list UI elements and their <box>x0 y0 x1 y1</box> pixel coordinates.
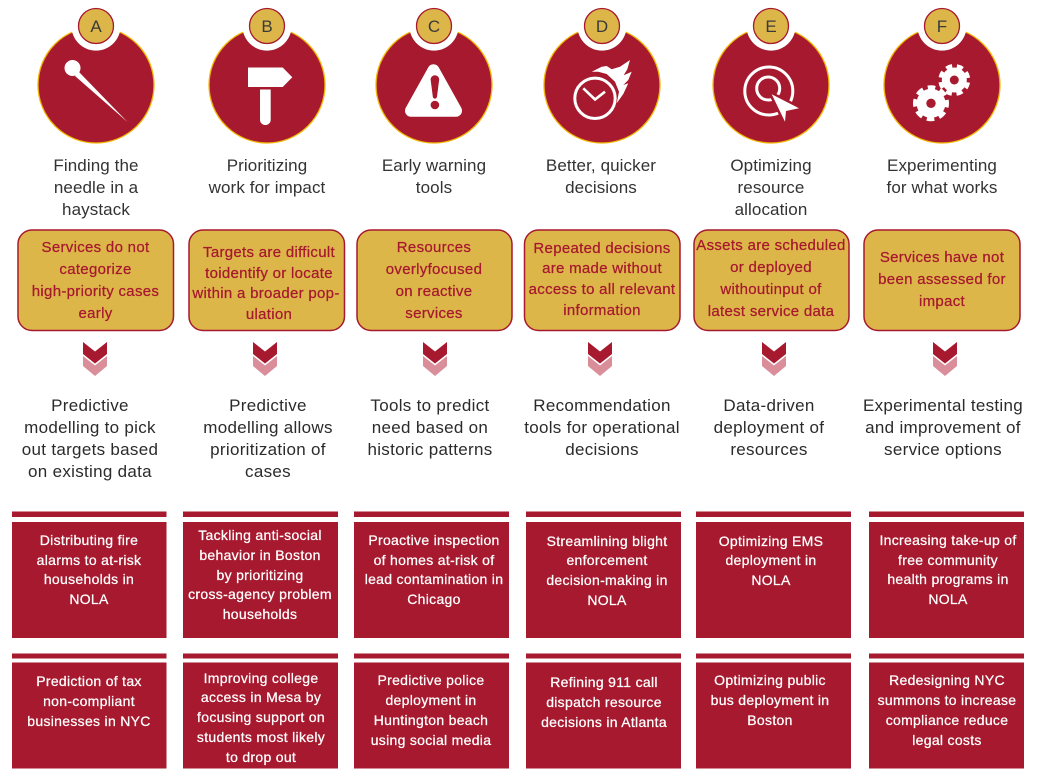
icon: signpost in red circle with badge B: B <box>261 17 273 36</box>
problem box C: overlyfocused <box>386 261 482 278</box>
solution text B <box>203 396 333 481</box>
example card A2: Prediction of tax <box>36 673 142 689</box>
example card D1: enforcement <box>566 552 648 568</box>
icon: target with cursor in red circle with badge E <box>713 1 829 143</box>
example card B1: cross-agency problem <box>188 586 332 602</box>
example card B1: Tackling anti-social <box>198 527 322 543</box>
example card E1: deployment in <box>725 552 817 568</box>
problem box D: are made without <box>542 260 662 277</box>
column E: optimizing resources <box>694 1 851 768</box>
problem box B: ulation <box>246 306 292 323</box>
example card F2: legal costs <box>912 732 982 748</box>
example card C2: Predictive police <box>377 672 485 688</box>
example card B1: by prioritizing <box>217 567 303 583</box>
example card E2: Optimizing public <box>714 672 826 688</box>
solution text E: deployment of <box>714 418 824 437</box>
heading C: tools <box>416 178 452 197</box>
column C: early warning <box>354 1 512 768</box>
problem box F: been assessed for <box>878 271 1006 288</box>
solution text F: Experimental testing <box>863 396 1023 415</box>
example card D2: decisions in Atlanta <box>541 714 667 730</box>
solution text A: Predictive <box>51 396 129 415</box>
example card D2 <box>526 654 681 768</box>
example card C2: deployment in <box>385 692 477 708</box>
problem box D: Repeated decisions <box>533 240 671 257</box>
problem box C: Resources <box>397 239 471 256</box>
arrow: chevrons C <box>423 342 447 376</box>
problem box A: early <box>78 305 113 322</box>
icon: gears in red circle with badge F <box>884 1 1000 143</box>
example card F1: free community <box>898 552 998 568</box>
example card E1: Optimizing EMS <box>719 533 823 549</box>
example card F2: compliance reduce <box>886 712 1008 728</box>
heading D: decisions <box>565 178 637 197</box>
icon: needle in red circle with badge A: A <box>90 17 102 36</box>
problem box D: access to all relevant <box>529 281 676 298</box>
example card B2 <box>183 654 338 768</box>
heading F <box>886 156 998 197</box>
heading A: haystack <box>62 200 130 219</box>
arrow: chevrons B <box>253 342 277 376</box>
example card C1: lead contamination in <box>365 571 503 587</box>
icon: flaming clock in red circle with badge D <box>544 1 660 143</box>
heading B: work for impact <box>208 178 326 197</box>
example card A1: NOLA <box>69 591 109 607</box>
example card E2: bus deployment in <box>711 692 829 708</box>
example card D1: Streamlining blight <box>547 533 667 549</box>
example card F2: Redesigning NYC <box>889 672 1005 688</box>
example card F2: summons to increase <box>878 692 1016 708</box>
solution text E: Data-driven <box>723 396 815 415</box>
solution text B: Predictive <box>229 396 307 415</box>
problem box F <box>864 230 1020 330</box>
icon: flaming clock in red circle with badge D: D <box>596 17 608 36</box>
heading B <box>208 156 326 197</box>
problem box E <box>694 230 849 330</box>
problem box C: on reactive <box>396 283 472 300</box>
solution text C: need based on <box>372 418 488 437</box>
problem box A: Services do not <box>42 239 150 256</box>
solution text F: and improvement of <box>865 418 1021 437</box>
icon: warning triangle in red circle with badge C: C <box>428 17 440 36</box>
solution text F: service options <box>884 440 1002 459</box>
icon: gears in red circle with badge F: F <box>937 17 947 36</box>
example card C1 <box>354 512 509 638</box>
problem box C <box>357 230 512 330</box>
solution text D: Recommendation <box>533 396 671 415</box>
example card B2: Improving college <box>204 670 318 686</box>
heading E: resource <box>738 178 804 197</box>
problem box E: Assets are scheduled <box>696 237 846 254</box>
solution text E <box>714 396 824 459</box>
example card C2: Huntington beach <box>374 712 488 728</box>
example card B2: access in Mesa by <box>201 689 321 705</box>
problem box D: information <box>563 302 641 319</box>
example card B1: behavior in Boston <box>199 547 321 563</box>
problem box E: latest service data <box>708 303 835 320</box>
problem box B: toidentify or locate <box>205 265 333 282</box>
arrow: chevrons E <box>762 342 786 376</box>
column B: prioritizing work <box>183 1 344 768</box>
problem box A: high-priority cases <box>32 283 159 300</box>
icon: signpost in red circle with badge B <box>209 1 325 143</box>
example card E1: NOLA <box>751 572 791 588</box>
arrow: chevrons D <box>588 342 612 376</box>
solution text B: cases <box>245 462 291 481</box>
example card E2: Boston <box>747 712 793 728</box>
heading A <box>53 156 139 219</box>
problem box E: withoutinput of <box>719 281 822 298</box>
problem box E: or deployed <box>730 259 812 276</box>
heading E: Optimizing <box>730 156 812 175</box>
example card A2: non-compliant <box>43 693 135 709</box>
solution text A: modelling to pick <box>24 418 156 437</box>
problem box C: services <box>405 305 463 322</box>
example card A2 <box>12 654 166 768</box>
heading E: allocation <box>735 200 807 219</box>
example card D1: NOLA <box>587 592 627 608</box>
solution text C <box>367 396 493 459</box>
column F: experimenting <box>863 1 1024 768</box>
example card F1: health programs in <box>887 571 1009 587</box>
heading B: Prioritizing <box>227 156 307 175</box>
heading E <box>730 156 812 219</box>
example card B2: students most likely <box>197 729 325 745</box>
example card F1: NOLA <box>928 591 968 607</box>
heading C <box>382 156 486 197</box>
arrow: chevrons F <box>933 342 957 376</box>
example card B2: focusing support on <box>197 709 325 725</box>
column A: finding the needle <box>12 1 174 768</box>
solution text D: decisions <box>565 440 639 459</box>
example card C1: Chicago <box>407 591 461 607</box>
solution text A: on existing data <box>28 462 152 481</box>
heading D <box>546 156 656 197</box>
example card C1: of homes at-risk of <box>374 552 494 568</box>
heading A: Finding the <box>53 156 139 175</box>
example card A1: Distributing fire <box>40 532 138 548</box>
example card A1: households in <box>44 571 134 587</box>
solution text B: prioritization of <box>210 440 326 459</box>
problem box B: Targets are difficult <box>203 244 335 261</box>
example card A1: alarms to at-risk <box>37 552 142 568</box>
example card C1: Proactive inspection <box>368 532 500 548</box>
heading F: Experimenting <box>887 156 997 175</box>
heading A: needle in a <box>54 178 139 197</box>
heading C: Early warning <box>382 156 486 175</box>
problem box D <box>524 230 680 330</box>
example card F1 <box>869 512 1024 638</box>
example card D2: dispatch resource <box>546 694 662 710</box>
solution text C: Tools to predict <box>370 396 490 415</box>
icon: needle in red circle with badge A <box>38 1 154 143</box>
example card F2 <box>869 654 1024 768</box>
example card E1 <box>696 512 851 638</box>
problem box F: Services have not <box>880 249 1005 266</box>
column D: better decisions <box>524 1 681 768</box>
problem box A: categorize <box>59 261 132 278</box>
icon: warning triangle in red circle with badge C <box>376 1 492 143</box>
solution text D <box>524 396 680 459</box>
example card C2 <box>354 654 509 768</box>
example card B1: households <box>223 606 297 622</box>
example card A2: businesses in NYC <box>27 713 151 729</box>
example card D1 <box>526 512 681 638</box>
solution text A <box>22 396 158 481</box>
problem box F: impact <box>919 293 966 310</box>
problem box A <box>18 230 174 330</box>
solution text D: tools for operational <box>524 418 680 437</box>
solution text E: resources <box>730 440 808 459</box>
example card C2: using social media <box>371 732 491 748</box>
icon: target with cursor in red circle with badge E: E <box>765 17 777 36</box>
heading F: for what works <box>886 178 998 197</box>
solution text C: historic patterns <box>367 440 493 459</box>
problem box B <box>189 230 344 330</box>
example card A1 <box>12 512 166 638</box>
example card D2: Refining 911 call <box>550 674 658 690</box>
example card D1: decision-making in <box>546 572 668 588</box>
arrow: chevrons A <box>83 342 107 376</box>
solution text B: modelling allows <box>203 418 333 437</box>
example card B1 <box>183 512 338 638</box>
example card E2 <box>696 654 851 768</box>
solution text F <box>863 396 1023 459</box>
example card F1: Increasing take-up of <box>879 532 1017 548</box>
problem box B: within a broader pop- <box>191 285 340 302</box>
heading D: Better, quicker <box>546 156 656 175</box>
example card B2: to drop out <box>226 749 296 765</box>
solution text A: out targets based <box>22 440 158 459</box>
